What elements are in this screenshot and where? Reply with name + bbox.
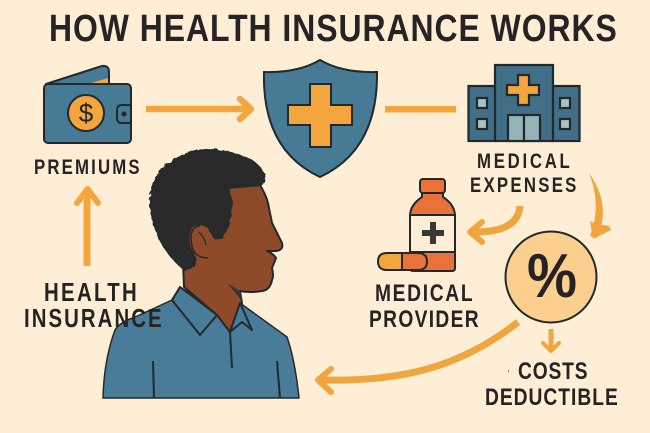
person: hair [150, 150, 265, 270]
connector: shield to hospital [385, 106, 456, 112]
icon: medicine bottle and pill [378, 179, 455, 271]
label: health insurance [24, 278, 162, 333]
arrow: percentage to costs [543, 329, 559, 351]
arrow: expenses to percentage [589, 173, 611, 239]
icon: percentage circle [506, 232, 596, 322]
label: health insurance: INSURANCE [24, 304, 162, 333]
arrow: expenses to provider [470, 206, 520, 242]
title: HOW HEALTH INSURANCE WORKS [49, 7, 617, 50]
person: collar [172, 287, 252, 335]
label: costs deductible: COSTS [518, 357, 588, 385]
arrow: percentage to person [318, 322, 518, 392]
arrow: insurance to premiums [77, 189, 98, 266]
person: ear [190, 225, 212, 258]
icon: percentage circle: % [527, 242, 577, 311]
label: medical expenses: EXPENSES [470, 174, 576, 198]
person: shirt [103, 287, 299, 398]
person: neck shadow [227, 283, 242, 301]
icon: hospital [468, 65, 580, 141]
arrow: premiums to shield [146, 99, 251, 119]
icon: wallet: $ [79, 98, 94, 128]
illustration: person in profile [103, 150, 299, 398]
label: costs deductible [485, 357, 618, 411]
label: premiums: PREMIUMS [34, 156, 140, 180]
label: medical provider: PROVIDER [369, 305, 479, 333]
label: medical provider: MEDICAL [375, 279, 473, 307]
label: medical provider [369, 279, 479, 333]
person: shirt seams [153, 332, 280, 398]
icon: wallet [44, 66, 131, 143]
label: medical expenses: MEDICAL [477, 150, 570, 174]
icon: shield with cross [264, 60, 377, 177]
label: medical expenses [470, 150, 576, 198]
label: costs deductible: DEDUCTIBLE [485, 383, 618, 411]
person: face and neck [183, 185, 282, 332]
label: health insurance: HEALTH [44, 278, 137, 307]
